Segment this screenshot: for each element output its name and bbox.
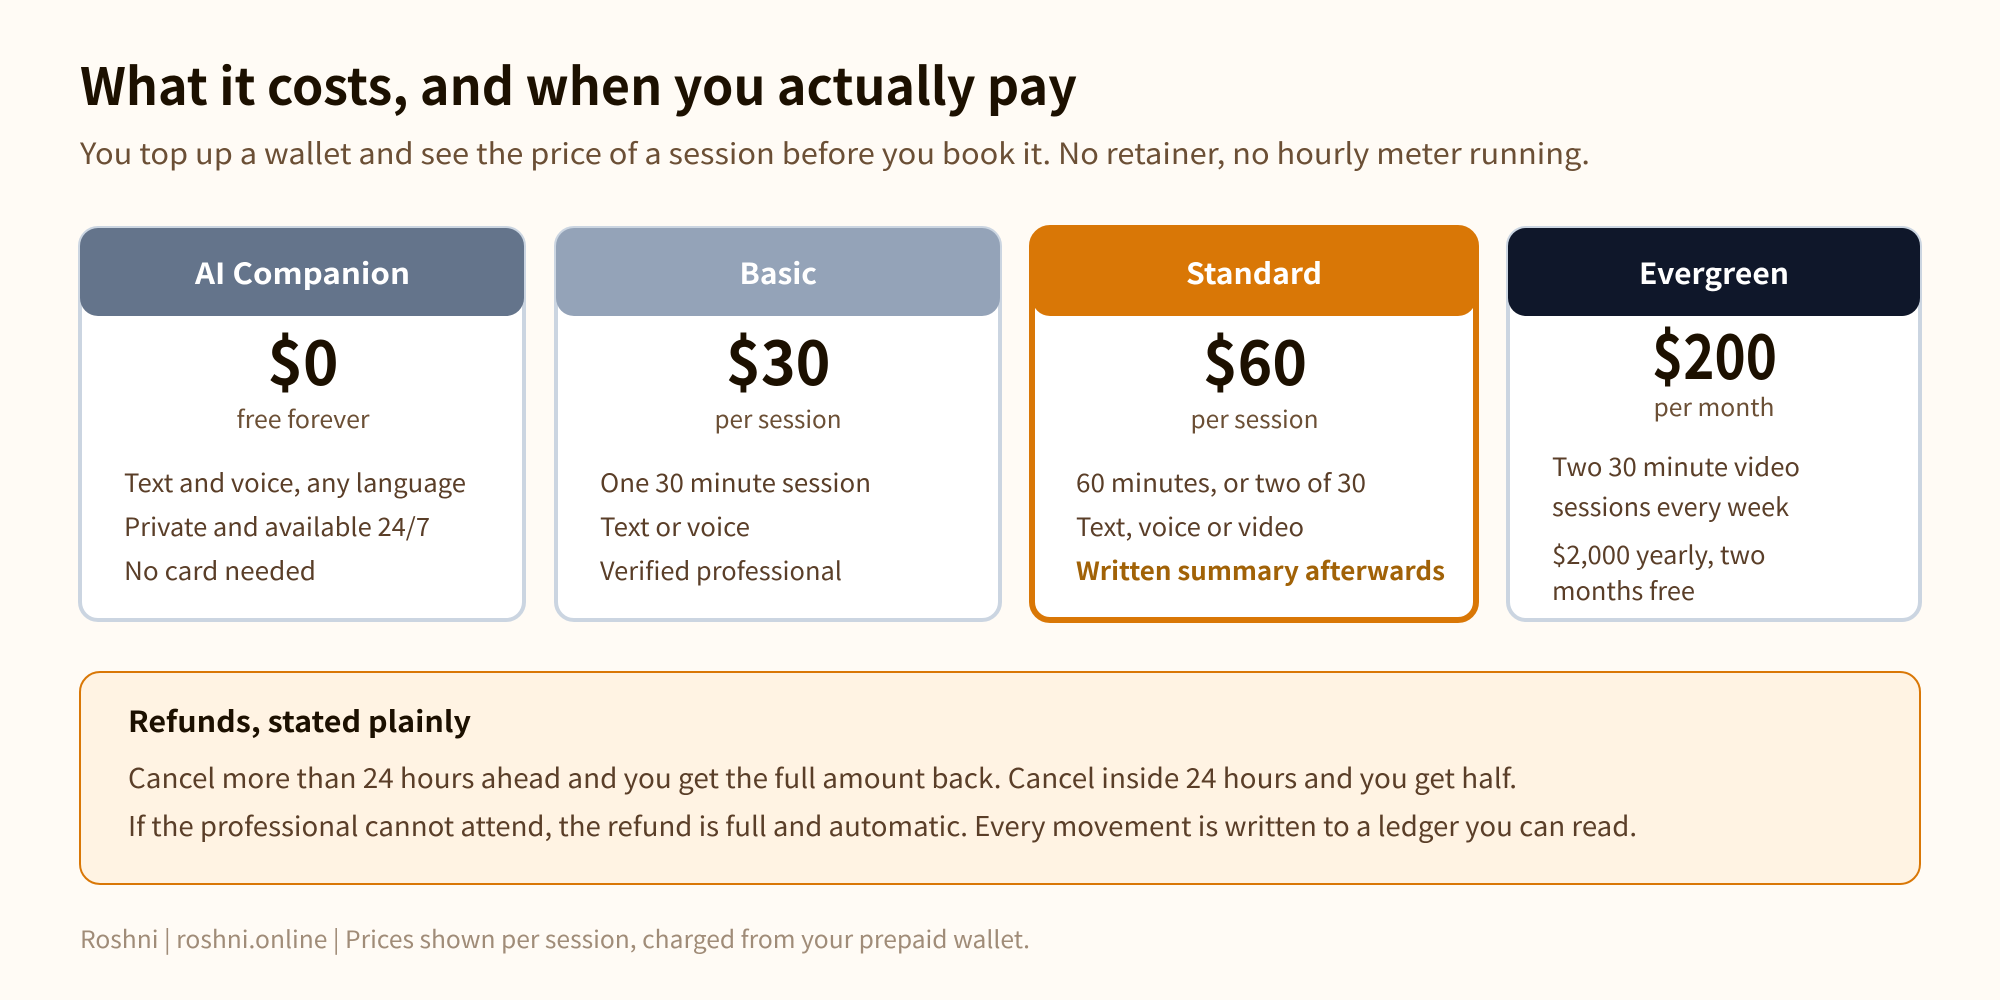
card body <box>1032 228 1476 620</box>
card header <box>80 228 524 316</box>
card body <box>1508 228 1920 620</box>
card header: Evergreen <box>1639 251 1789 293</box>
price: $200 <box>1652 307 1777 397</box>
feature list: Verified professional <box>600 552 842 588</box>
card header <box>556 228 1000 316</box>
price note: per month <box>1654 388 1774 423</box>
panel: AI Companion plan <box>80 228 524 620</box>
panel: refunds <box>80 672 1920 884</box>
feature list: One 30 minute session <box>600 464 871 500</box>
price note: free forever <box>236 400 370 435</box>
feature list: sessions every week <box>1552 488 1789 524</box>
callout text: Cancel more than 24 hours ahead and you get the full amount back. Cancel inside 24 hours and you get half. <box>128 757 1517 796</box>
feature list: Text and voice, any language <box>124 464 466 500</box>
card header <box>1508 228 1920 316</box>
feature list: months free <box>1552 572 1695 608</box>
title: What it costs, and when you actually pay <box>80 46 1077 120</box>
feature list <box>124 464 466 588</box>
price note: per session <box>1190 400 1318 435</box>
feature list: Text, voice or video <box>1076 508 1304 544</box>
feature list <box>1076 464 1445 588</box>
price note: per session <box>714 400 842 435</box>
subtitle: You top up a wallet and see the price of a session before you book it. No retainer, no hourly meter running. <box>79 131 1590 173</box>
callout text: If the professional cannot attend, the refund is full and automatic. Every movement is written to a ledger you can read. <box>128 805 1637 844</box>
feature list: Text or voice <box>600 508 750 544</box>
feature list: No card needed <box>124 552 316 588</box>
price: $30 <box>726 313 830 403</box>
feature list <box>1552 448 1800 608</box>
card body <box>556 228 1000 620</box>
callout heading: Refunds, stated plainly <box>128 699 471 741</box>
feature list: 60 minutes, or two of 30 <box>1076 464 1366 500</box>
callout text <box>128 757 1637 844</box>
panel: Basic plan <box>556 228 1000 620</box>
card header <box>1032 228 1476 316</box>
footer note: Roshni | roshni.online | Prices shown per session, charged from your prepaid wallet. <box>80 920 1030 955</box>
feature list: $2,000 yearly, two <box>1552 536 1766 572</box>
price: $0 <box>268 313 338 403</box>
panel: Evergreen plan <box>1508 228 1920 620</box>
feature list: Written summary afterwards <box>1076 552 1445 588</box>
feature list: Private and available 24/7 <box>124 508 430 544</box>
card body <box>80 228 524 620</box>
card header: Standard <box>1186 251 1322 293</box>
panel: Standard plan (highlighted) <box>1032 228 1476 620</box>
feature list <box>600 464 871 588</box>
card header: AI Companion <box>194 251 410 293</box>
callout box <box>80 672 1920 884</box>
price: $60 <box>1203 313 1307 403</box>
card header: Basic <box>740 251 817 293</box>
feature list: Two 30 minute video <box>1552 448 1800 484</box>
